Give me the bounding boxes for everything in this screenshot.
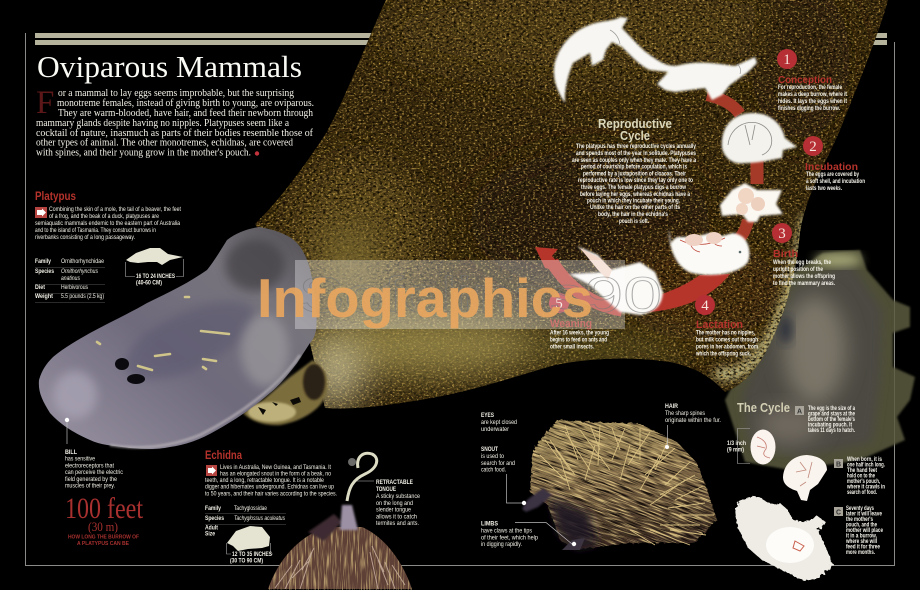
photo: platypus hind foot	[725, 250, 915, 470]
fact table: Adult	[205, 524, 218, 532]
callout: limbs: in digging rapidly.	[481, 541, 522, 548]
step 2: incubation: a soft shell, and incubation	[806, 178, 865, 185]
icon: echidna size silhouette	[226, 526, 273, 564]
step 5: weaning: 5	[555, 296, 563, 312]
callout: burrow length: 100 feet	[65, 492, 144, 525]
photo: platypus body fur	[250, 0, 920, 420]
introduction text: cocktail of nature, inasmuch as parts of their bodies resemble those of	[36, 128, 314, 139]
callout: bill: field generated by the	[65, 476, 117, 483]
step 4: lactation: but milk comes out through	[696, 336, 758, 344]
callout: bill: muscles of their prey.	[65, 482, 115, 490]
heading: Echidna	[205, 450, 242, 462]
icon: platypus size silhouette: 16 TO 24 INCHES	[136, 273, 175, 280]
step 2: incubation: Incubation	[805, 161, 858, 173]
introduction text: or a mammal to lay eggs seems improbable, but the surprising	[58, 88, 294, 99]
callout: bill	[65, 418, 123, 490]
egg with size bracket	[727, 428, 776, 464]
step B: where it crawls in	[846, 484, 885, 490]
callout: snout: search for and	[481, 460, 515, 467]
step B: When born, it is	[847, 456, 882, 463]
introduction text: with spines, and their young grow in the mother's pouch.	[36, 148, 251, 158]
callout: hair: The sharp spines	[665, 410, 705, 417]
step 5: weaning: other small insects.	[550, 344, 594, 350]
newborn illustration	[783, 455, 827, 501]
step B: B	[836, 462, 841, 468]
icon: arrow marker	[35, 207, 47, 218]
step A: grape and stays at the	[808, 410, 855, 418]
fact table: Family	[35, 258, 51, 265]
step 3: birth: to find the mammary areas.	[773, 280, 835, 287]
callout: burrow length: A PLATYPUS CAN BE	[77, 541, 129, 547]
description text	[35, 206, 181, 241]
body text: reproductive rate is low since they lay only one to	[578, 177, 693, 184]
body text: body, the hair in the echidna's	[598, 211, 668, 218]
callout: hair: HAIR	[665, 403, 678, 410]
callout: limbs: LIMBS	[481, 520, 498, 528]
callout: hair: originate within the fur.	[665, 417, 721, 424]
step 3: birth: upright position of the	[773, 266, 823, 273]
egg with size bracket: 1/3 inch	[727, 440, 746, 447]
fact table: Tachyglossus aculeatus	[234, 515, 285, 522]
cycle arrows	[535, 95, 757, 313]
photo: platypus bill	[39, 227, 317, 449]
callout: retractable tongue: TONGUE	[376, 486, 396, 493]
icon: arrow marker	[206, 465, 217, 476]
fact table: Ornithorhynchidae	[61, 258, 104, 265]
icon: echidna size silhouette: 12 TO 35 INCHES	[232, 551, 272, 558]
fact table	[35, 258, 105, 302]
fact table: Weight	[35, 293, 53, 300]
callout: eyes: are kept closed	[481, 419, 517, 426]
drop cap: F	[36, 85, 54, 121]
step C: where she will	[845, 538, 877, 545]
icon: platypus size silhouette	[126, 248, 184, 286]
panel: reproductive cycle intro	[572, 117, 696, 225]
callout: retractable tongue	[357, 479, 420, 527]
panel: the cycle	[727, 401, 885, 581]
description text: Lives in Australia, New Guinea, and Tasmania. It	[220, 464, 331, 471]
illustration: young platypus	[569, 246, 663, 315]
description text: has an elongated snout in the form of a beak, no	[220, 470, 331, 478]
watermark: Sofolinas90	[298, 267, 662, 323]
photo: platypus lower jaw	[243, 360, 328, 425]
illustration: egg embryo	[722, 113, 797, 163]
body text: and spends most of the year in solitude. Platypuses	[576, 150, 696, 157]
fact table: Ornithorhynchus	[61, 268, 98, 275]
step A	[795, 405, 855, 434]
step C	[834, 505, 883, 556]
step 1: conception: makes a deep burrow, where it	[778, 91, 847, 98]
fact table: 5.5 pounds (2.5 kg)	[61, 293, 104, 300]
step 4: lactation: pores in her abdomen, from	[696, 344, 758, 350]
callout: eyes: underwater	[481, 426, 509, 433]
illustration: platypus pair mating	[554, 17, 757, 103]
callout: burrow length: HOW LONG THE BURROW OF	[68, 534, 139, 540]
callout: retractable tongue: allows it to catch	[376, 514, 417, 520]
step 4: lactation: The mother has no nipples,	[696, 330, 755, 336]
introduction text: monotreme females, instead of giving birth to young, are oviparous.	[57, 98, 314, 109]
panel: title and introduction	[36, 49, 314, 158]
description text: semiaquatic mammals endemic to the eastern part of Australia	[35, 220, 180, 227]
step C: it in a burrow,	[846, 532, 877, 540]
description text: of a frog, and the beak of a duck, platypuses are	[49, 213, 159, 220]
step C: more months.	[846, 549, 875, 556]
step 4: lactation: 4	[701, 298, 709, 314]
step B: hold on to the	[847, 472, 875, 480]
description text: Combining the skin of a mole, the tail of a beaver, the feet	[49, 206, 181, 213]
icon: echidna size silhouette: (30 TO 90 CM)	[230, 558, 263, 564]
callout: bill: BILL	[65, 449, 77, 456]
step A: bottom of the female's	[808, 416, 855, 423]
title: Oviparous Mammals	[37, 49, 302, 84]
body text	[572, 143, 696, 225]
step B: The hand feet	[847, 467, 877, 474]
step 1: conception: For reproduction, the female	[778, 84, 842, 91]
watermark: Infographics	[257, 267, 593, 329]
body text: performed by a juxtaposition of cloacas. Their	[583, 170, 686, 178]
step 1: conception: Conception	[778, 74, 832, 86]
description text: teeth, and a long, retractable tongue. It is a notable	[205, 477, 324, 484]
step C: pouch, and the	[846, 522, 877, 528]
egg with size bracket: (9 mm)	[727, 446, 744, 454]
tongue	[347, 453, 377, 501]
callout: eyes	[481, 412, 517, 433]
fact table: Herbivorous	[61, 284, 88, 291]
body text: before laying her eggs, whereas echidnas have a	[580, 191, 690, 198]
callout: retractable tongue: termites and ants.	[376, 520, 419, 527]
step 4: lactation	[695, 295, 758, 358]
callout: retractable tongue: RETRACTABLE	[376, 479, 413, 486]
fact table: anatinus	[61, 275, 80, 282]
step B	[834, 456, 885, 496]
step 3: birth: Birth	[773, 248, 798, 260]
panel: platypus facts	[35, 191, 184, 302]
step 2: incubation	[803, 136, 865, 192]
step 2: incubation: lasts two weeks.	[806, 185, 842, 192]
nostrils	[115, 358, 145, 384]
step C: later it will leave	[846, 510, 882, 518]
body text: are seen as couples only when they mate. They have a	[572, 157, 696, 164]
step C: feed it for three	[846, 544, 880, 550]
bill flecks	[97, 297, 229, 370]
description text	[205, 464, 337, 498]
step 4: lactation: which the offspring suck.	[695, 350, 751, 358]
step 1: conception: 1	[783, 52, 791, 68]
heading: Platypus	[35, 191, 76, 203]
body text: The platypus has three reproductive cycles annually	[576, 143, 696, 150]
ants	[348, 458, 356, 466]
fact table: Tachyglossidae	[234, 505, 267, 512]
step 5: weaning	[549, 293, 609, 350]
panel: reproductive cycle intro: Cycle	[620, 129, 650, 143]
callout: snout: catch food.	[481, 466, 506, 474]
panel: echidna facts	[205, 450, 337, 564]
description text: riverbanks consisting of a long passageway.	[35, 234, 135, 241]
description text: and to the island of Tasmania. They construct burrows in	[35, 227, 156, 234]
fact table: Diet	[35, 284, 45, 291]
callout: retractable tongue: A sticky substance	[376, 493, 420, 500]
fact table: Species	[205, 515, 224, 522]
callout: snout	[481, 446, 526, 505]
step B: mother's pouch,	[847, 478, 880, 485]
step 1: conception: finishes digging the burrow.	[778, 105, 840, 112]
step C: C	[836, 510, 841, 516]
step 1: conception: hides. It lays the eggs when it	[778, 98, 847, 105]
step A: A	[797, 408, 802, 416]
step C: the mother's	[846, 516, 873, 523]
snout	[522, 488, 552, 512]
step A: The egg is the size of a	[808, 405, 855, 412]
step 3: birth: When the egg breaks, the	[773, 259, 831, 266]
step 3: birth: mother allows the offspring	[773, 273, 835, 280]
step B: search of food.	[847, 489, 877, 496]
step 4: lactation: Lactation	[696, 319, 743, 331]
callout: bill: has sensitive	[65, 456, 95, 462]
fact table: Species	[35, 268, 54, 275]
callout: limbs: of their feet, which help	[481, 534, 538, 542]
step 1: conception	[777, 49, 847, 112]
body text: three eggs. The female platypus digs a burrow	[581, 184, 686, 191]
foot	[562, 538, 585, 550]
step A: incubating pouch. It	[808, 422, 852, 428]
introduction text: other types of animal. The other monotremes, echidnas, are covered	[36, 138, 294, 148]
callout: burrow length	[65, 492, 144, 547]
step A: takes 11 days to hatch.	[808, 427, 855, 434]
callout: bill: electroreceptors that	[65, 462, 114, 470]
callout: retractable tongue: on the long and	[376, 500, 413, 507]
description text: to 50 years, and their hair varies according to the species.	[205, 490, 337, 498]
step C: mother will place	[846, 527, 883, 534]
photo: echidna underside with tongue	[265, 453, 415, 590]
callout: bill: can perceive the electric	[65, 469, 123, 476]
juvenile echidna illustration	[735, 497, 833, 581]
illustration: hatching egg	[720, 183, 783, 222]
callout: burrow length: (30 m)	[88, 519, 118, 534]
step 2: incubation: 2	[809, 139, 817, 155]
illustration: mother and newborn	[669, 229, 749, 275]
introduction text: mammary glands despite having no nipples. Platypuses seem like a	[36, 118, 289, 129]
step 5: weaning: After 16 weeks, the young	[550, 330, 609, 336]
callout: limbs: have claws at the tips	[481, 528, 532, 534]
fact table	[205, 505, 286, 538]
introduction text: They are warm-blooded, have hair, and feed their newborn through	[58, 108, 314, 119]
heading: The Cycle	[737, 401, 790, 415]
step C: Seventy days	[846, 505, 874, 512]
step 5: weaning: begins to feed on ants and	[550, 336, 607, 344]
icon: platypus size silhouette: (40-60 CM)	[136, 280, 162, 286]
heading: Reproductive	[598, 117, 672, 131]
step 3: birth: 3	[778, 226, 786, 242]
body text: pouch is soft.	[619, 218, 649, 225]
fact table: Family	[205, 505, 221, 512]
body text: Unlike the hair on the other parts of its	[590, 204, 680, 211]
introduction text	[36, 88, 314, 158]
body text: pouch in which they incubate their young.	[587, 198, 680, 204]
photo: echidna side view	[522, 419, 718, 550]
callout: snout: SNOUT	[481, 446, 498, 453]
step 2: incubation: The eggs are covered by	[806, 171, 859, 178]
callout: hair	[665, 403, 721, 449]
callout: snout: is used to	[481, 453, 504, 460]
step 5: weaning: Weaning	[550, 318, 592, 330]
body text: period of courtship before copulation, which is	[581, 164, 687, 170]
callout: eyes: EYES	[481, 412, 494, 419]
step 3: birth	[772, 223, 835, 287]
fact table: Size	[205, 530, 215, 538]
step B: one half inch long.	[847, 462, 885, 468]
callout: retractable tongue: slender tongue	[376, 506, 411, 514]
callout: limbs	[481, 520, 576, 548]
description text: digger and hibernates underground. Echidnas can live up	[205, 484, 334, 490]
